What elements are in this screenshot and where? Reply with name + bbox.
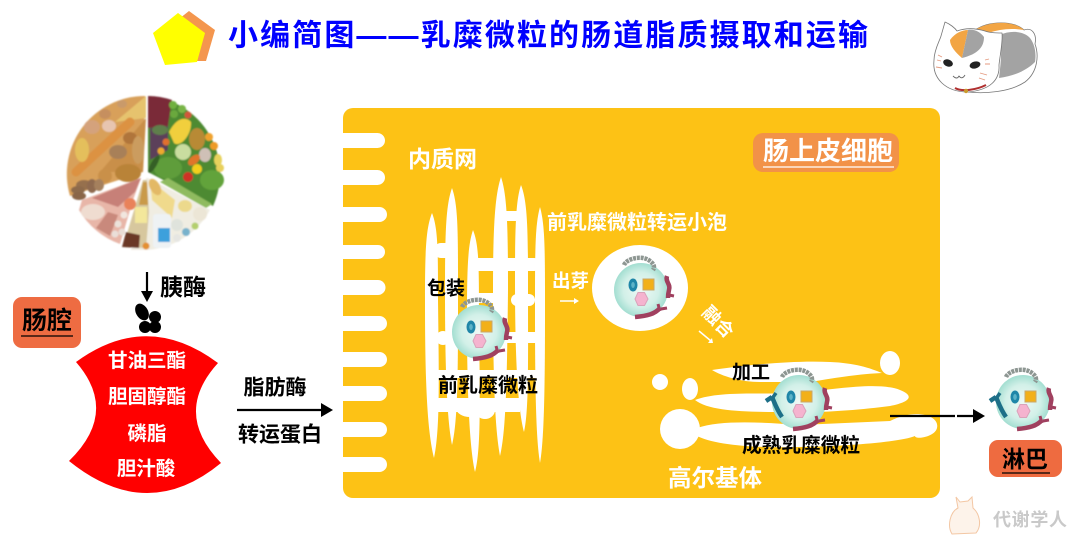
panel: dietary lipids: 磷脂 [127, 423, 167, 445]
panel: dietary lipids: 甘油三酯 [108, 350, 186, 372]
label: lumen [13, 297, 81, 348]
endoplasmic reticulum [425, 177, 545, 472]
title: 小编简图——乳糜微粒的肠道脂质摄取和运输 [228, 20, 868, 52]
fruit and vegetable sector [146, 96, 224, 208]
chylomicron: mature in Golgi [766, 370, 832, 429]
sweets sector [122, 180, 150, 250]
food pie image [67, 96, 224, 250]
panel: enterocyte [340, 108, 940, 498]
dairy sector [131, 177, 210, 250]
label: lipase: 脂肪酶 [244, 376, 306, 400]
label: budding with arrow: 出芽 [552, 270, 589, 292]
label: transporter: 转运蛋白 [238, 424, 322, 446]
arrow: pancreatic enzyme [141, 272, 153, 302]
label: processing: 加工 [732, 362, 770, 384]
label: lymph: 淋巴 [1002, 446, 1048, 472]
chylomicron: pre-chylomicron in ER [452, 300, 512, 359]
label: Golgi: 高尔基体 [668, 465, 762, 491]
label: enterocyte [753, 133, 899, 172]
label: budding with arrow [552, 270, 589, 304]
label: fusion with arrow: 融合 [698, 301, 739, 342]
label: pre-chylomicron transport vesicle: 前乳糜微粒转运小泡 [547, 211, 727, 234]
chylomicron: in vesicle [614, 258, 674, 317]
meat and fish sector [79, 178, 141, 244]
label: lymph [989, 440, 1062, 477]
label: pre-chylomicron: 前乳糜微粒 [438, 374, 538, 397]
label: endoplasmic reticulum: 内质网 [408, 146, 477, 172]
label: packaging: 包装 [427, 278, 465, 300]
label: lumen: 肠腔 [22, 307, 72, 335]
arrow: into cell [237, 403, 333, 417]
chylomicron: in lymph [990, 370, 1056, 429]
vesicle [592, 245, 688, 331]
microvilli [340, 133, 387, 472]
grains sector [67, 96, 146, 200]
watermark: 代谢学人 [993, 509, 1067, 530]
arrow: to lymph [890, 409, 985, 423]
panel: dietary lipids [69, 336, 221, 493]
label: mature chylomicron: 成熟乳糜微粒 [742, 434, 860, 457]
panel: dietary lipids: 胆汁酸 [117, 458, 176, 480]
icon: pentagons [153, 11, 215, 65]
golgi apparatus [652, 351, 937, 449]
label: enterocyte: 肠上皮细胞 [763, 136, 893, 166]
icon: enzyme [132, 301, 161, 333]
panel: dietary lipids: 胆固醇酯 [108, 386, 186, 408]
label: pancreatic lipase: 胰酶 [160, 274, 206, 300]
watermark [950, 497, 1067, 534]
icon: cat [934, 22, 1037, 93]
